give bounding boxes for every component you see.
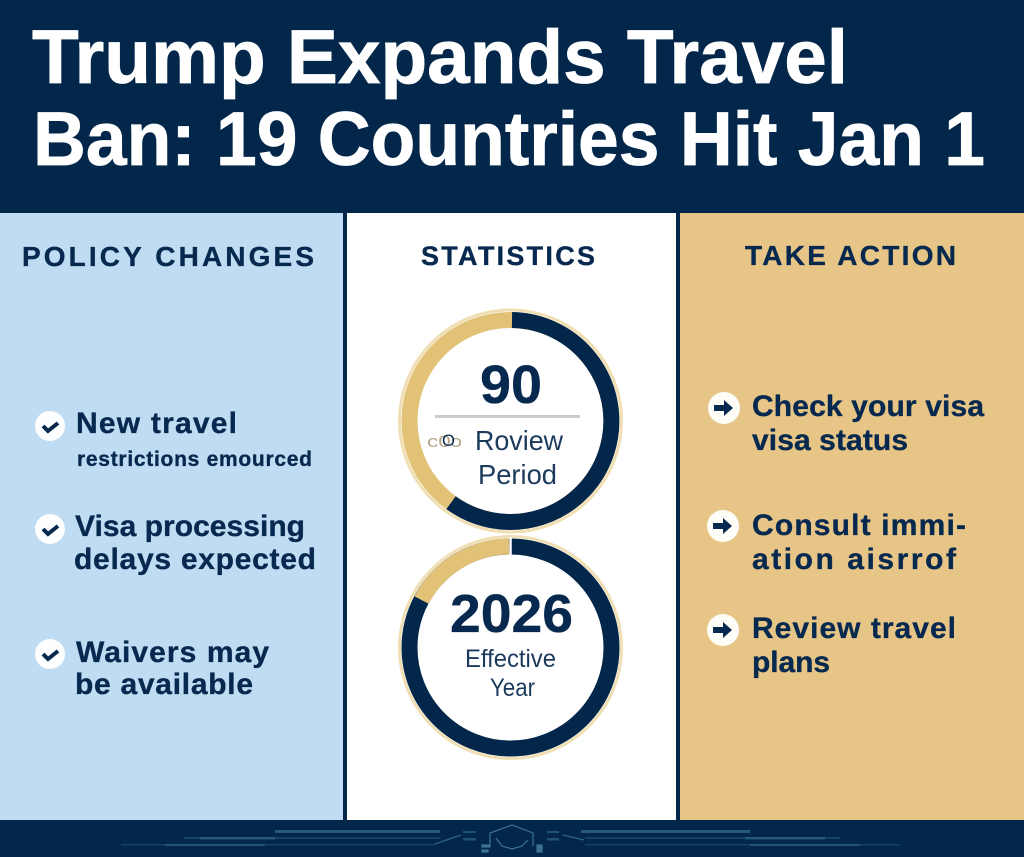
donut: 2026 effective year: Effective (465, 645, 556, 673)
item: consult immigration: ation aisrrof (752, 543, 957, 576)
footer emblem (482, 825, 542, 852)
item: check visa status (708, 390, 984, 457)
donut: 2026 effective year (400, 536, 622, 758)
item: consult immigration (707, 509, 966, 576)
heading: policy changes: POLICY CHANGES (22, 241, 314, 272)
heading: statistics: STATISTICS (421, 241, 595, 271)
donut: 90 review period: 90 (480, 355, 542, 415)
item: check visa status: visa status (752, 424, 908, 457)
donut: 90 review period: O (442, 431, 455, 450)
heading: take action: TAKE ACTION (745, 240, 956, 271)
item: new travel restrictions (35, 407, 312, 471)
panel: statistics (347, 213, 676, 820)
item: check visa status: Check your visa (752, 390, 984, 423)
item: review travel plans: Review travel (752, 612, 956, 645)
item: visa processing delays (35, 510, 316, 576)
item: review travel plans: plans (752, 646, 830, 679)
panel: take action (680, 213, 1024, 820)
item: visa processing delays: delays expected (74, 543, 316, 576)
footer band (0, 820, 1024, 857)
donut: 90 review period (400, 310, 622, 532)
item: consult immigration: Consult immi- (752, 509, 966, 542)
title banner (0, 0, 1024, 212)
item: waivers (35, 636, 269, 701)
donut: 90 review period: Roview (475, 425, 564, 456)
donut: 90 review period: Period (478, 459, 557, 490)
donut: 2026 effective year: 2026 (450, 584, 573, 644)
item: review travel plans (707, 612, 956, 679)
panel: policy changes (0, 213, 343, 820)
item: visa processing delays: Visa processing (75, 510, 305, 543)
item: new travel restrictions: restrictions emourced (77, 448, 312, 471)
item: waivers: Waivers may (76, 636, 269, 669)
donut: 90 review period: c0ɔ (427, 432, 462, 451)
title banner: Trump Expands Travel (32, 15, 848, 100)
title banner: Ban: 19 Countries Hit Jan 1 (33, 97, 985, 182)
item: waivers: be available (75, 668, 253, 701)
donut: 2026 effective year: Year (490, 674, 535, 702)
item: new travel restrictions: New travel (76, 407, 237, 440)
